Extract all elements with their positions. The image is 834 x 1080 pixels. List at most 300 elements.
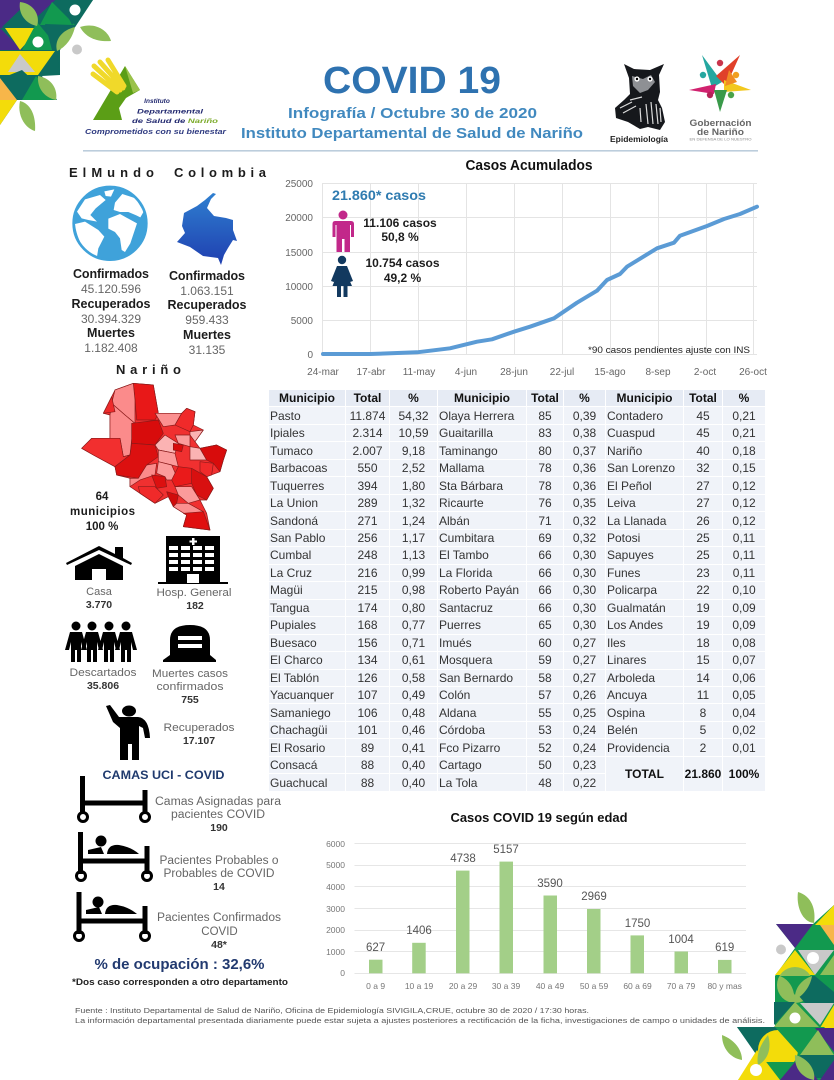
table: casos por municipio: Belén (607, 723, 638, 737)
table: casos por municipio: 0,02 (732, 723, 756, 737)
bed: pacientes confirmados (74, 892, 281, 951)
table: casos por municipio: 0,30 (573, 618, 596, 632)
stats: El Mundo: Confirmados (73, 267, 149, 281)
table: casos por municipio: 550 (357, 461, 378, 475)
stat: female cases (365, 256, 440, 285)
table: casos por municipio: Guachucal (270, 776, 327, 790)
table: casos por municipio: 0,99 (402, 566, 425, 580)
table: casos por municipio: 40 (696, 444, 710, 458)
chart grid (322, 183, 757, 355)
table: casos por municipio: 0,01 (732, 741, 756, 755)
table: casos por municipio: 0,40 (402, 776, 425, 790)
table: casos por municipio: 0,30 (573, 548, 596, 562)
stats: El Mundo: 1.182.408 (84, 341, 138, 355)
table: casos por municipio: 0,49 (402, 688, 425, 702)
bed: pacientes confirmados: 48* (211, 939, 228, 951)
logo: Gobernación de Nariño: de Nariño (697, 127, 744, 138)
value labels: 619 (715, 942, 734, 954)
table: casos por municipio: Policarpa (607, 583, 657, 597)
table: casos por municipio: 14 (696, 671, 710, 685)
table: casos por municipio: Pasto (270, 409, 301, 423)
table: casos por municipio: 0,06 (732, 671, 756, 685)
heading: Colombia: Colombia (174, 165, 267, 180)
table: casos por municipio: 248 (357, 548, 378, 562)
table: casos por municipio: Ancuya (607, 688, 647, 702)
table: casos por municipio: 0,11 (733, 566, 755, 580)
table: casos por municipio: 0,98 (402, 583, 425, 597)
table: casos por municipio: Santacruz (439, 601, 493, 615)
stats: Colombia: Recuperados (168, 298, 247, 312)
icon: person waving (106, 705, 150, 760)
logo: Instituto Departamental de Salud de Nariño (85, 60, 227, 136)
source note: Fuente : Instituto Departamental de Salud de Nariño, Oficina de Epidemiología SIVIGILA,CRUE, octubre 30 de 2020 / 17:30 horas. (75, 1006, 589, 1015)
table: casos por municipio: 2,52 (402, 461, 425, 475)
table: casos por municipio: 156 (357, 636, 378, 650)
value labels: 4738 (450, 853, 476, 865)
stat: Hosp. General: Hosp. General (156, 587, 232, 599)
stat: Hosp. General: 182 (186, 600, 204, 612)
table: casos por municipio: 69 (538, 531, 552, 545)
table: casos por municipio: Barbacoas (270, 461, 327, 475)
table: casos por municipio: 0,12 (732, 479, 756, 493)
category labels: 70 a 79 (667, 981, 695, 991)
table: casos por municipio: 25 (696, 531, 710, 545)
table: casos por municipio: 83 (538, 426, 552, 440)
table: casos por municipio: Consacá (270, 758, 317, 772)
table: casos por municipio: 21.860 (685, 767, 721, 781)
table: casos por municipio: 66 (538, 548, 552, 562)
table: casos por municipio: 78 (538, 461, 552, 475)
table: casos por municipio: Imués (439, 636, 472, 650)
table: casos por municipio: 80 (538, 444, 552, 458)
table: casos por municipio: % (739, 391, 749, 405)
table: casos por municipio: Yacuanquer (270, 688, 334, 702)
table: casos por municipio: Guaitarilla (439, 426, 493, 440)
table: casos por municipio: 58 (538, 671, 552, 685)
logo: Epidemiología owl (610, 64, 668, 144)
category labels: 50 a 59 (580, 981, 608, 991)
table: casos por municipio: 0,12 (732, 514, 756, 528)
y axis labels: 0 (340, 968, 345, 978)
note: pending cases: *90 casos pendientes ajuste con INS (588, 345, 750, 356)
table: casos por municipio: 0,46 (402, 723, 425, 737)
stat: municipios (70, 491, 135, 533)
value labels (366, 844, 734, 954)
subtitle: date: Infografía / Octubre 30 de 2020 (288, 105, 537, 122)
stats: Colombia: Confirmados (169, 269, 245, 283)
table: casos por municipio: 1,13 (402, 548, 425, 562)
stat: Hosp. General (156, 536, 232, 612)
table: casos por municipio: 32 (696, 461, 710, 475)
stat: Muertes casos confirmados: 755 (181, 694, 199, 706)
category labels (366, 981, 742, 991)
source note (75, 1006, 765, 1025)
table: casos por municipio: 0,36 (573, 479, 596, 493)
y axis labels: 0 (307, 350, 313, 361)
table: casos por municipio: 1,80 (402, 479, 425, 493)
table: casos por municipio: Los Andes (607, 618, 663, 632)
stat: Recuperados: 17.107 (183, 735, 215, 747)
table: casos por municipio: Magüi (270, 583, 303, 597)
table: casos por municipio: 0,09 (732, 618, 756, 632)
bed: pacientes probables: Pacientes Probables o (160, 855, 278, 867)
icon: Colombia map (177, 193, 237, 265)
table: casos por municipio: Nariño (607, 444, 642, 458)
table: casos por municipio: 0,30 (573, 583, 596, 597)
table: casos por municipio: 0,32 (573, 531, 596, 545)
stats: Colombia: 959.433 (185, 313, 229, 327)
table: casos por municipio: Potosi (607, 531, 640, 545)
table: casos por municipio: Ricaurte (439, 496, 484, 510)
table: casos por municipio: 85 (538, 409, 552, 423)
category labels: 30 a 39 (492, 981, 520, 991)
table: casos por municipio: 0,04 (732, 706, 756, 720)
stats: El Mundo: Recuperados (72, 297, 151, 311)
table: casos por municipio: 271 (357, 514, 378, 528)
stats: Colombia: Muertes (183, 328, 231, 342)
icon: globe (73, 186, 147, 261)
table: casos por municipio: 45 (696, 409, 710, 423)
table: casos por municipio: 60 (538, 636, 552, 650)
table: casos por municipio: 0,71 (402, 636, 425, 650)
table: casos por municipio: La Union (270, 496, 318, 510)
source note: La información departamental presentada diariamente puede estar sujeta a ajustes posteriores a rectificación de la ficha, investigaciones de campo o unidades de análisis. (75, 1016, 765, 1025)
table: casos por municipio: 26 (696, 514, 710, 528)
table: casos por municipio: Aldana (439, 706, 476, 720)
table: casos por municipio: 88 (361, 758, 374, 772)
table: casos por municipio: 18 (696, 636, 710, 650)
subtitle: institute: Instituto Departamental de Salud de Nariño (241, 125, 583, 142)
stat: municipios: 64 (96, 491, 109, 503)
table: casos por municipio: 168 (357, 618, 378, 632)
table: casos por municipio: 59 (538, 653, 552, 667)
table: casos por municipio: Sta Bárbara (439, 479, 503, 493)
callout: occupancy: % de ocupación : 32,6% (94, 956, 264, 973)
stats: El Mundo: 30.394.329 (81, 312, 141, 326)
stats: El Mundo: 45.120.596 (81, 282, 141, 296)
table: casos por municipio: El Charco (270, 653, 323, 667)
stat: Recuperados (106, 705, 235, 760)
table: casos por municipio: 65 (538, 618, 552, 632)
table: casos por municipio: Colón (439, 688, 470, 702)
stat: Descartados: 35.806 (87, 680, 119, 692)
table: casos por municipio: 0,40 (402, 758, 425, 772)
table: casos por municipio: 394 (357, 479, 378, 493)
heading: Camas UCI: CAMAS UCI - COVID (102, 768, 225, 782)
chart: Casos según edad (326, 810, 746, 991)
stats: El Mundo: Muertes (87, 326, 135, 340)
table: casos por municipio: 0,21 (732, 409, 756, 423)
icon: occupied bed (76, 832, 152, 880)
chart: Casos Acumulados (285, 158, 767, 378)
table: casos por municipio: 19 (696, 601, 710, 615)
table: casos por municipio: La Tola (439, 776, 477, 790)
stat: male cases (363, 216, 437, 244)
stat: male cases: 11.106 casos (363, 216, 437, 230)
table: casos por municipio: 0,39 (573, 409, 596, 423)
table: casos por municipio: El Tambo (439, 548, 489, 562)
table: casos por municipio: Total (689, 391, 717, 405)
x axis labels: 11-may (403, 367, 435, 378)
table: casos por municipio: 0,25 (573, 706, 596, 720)
table: casos por municipio: 0,18 (732, 444, 756, 458)
value labels: 3590 (537, 878, 563, 890)
stats: Colombia: 31.135 (189, 343, 226, 357)
decoration: top-left geometric corner (0, 0, 111, 131)
table: casos por municipio: San Lorenzo (607, 461, 675, 475)
table: casos por municipio: Puerres (439, 618, 481, 632)
heading: Nariño: Nariño (116, 362, 181, 377)
table: casos por municipio: 11.874 (350, 409, 385, 423)
bed: camas asignadas: 190 (210, 822, 228, 834)
table: casos por municipio: Ipiales (270, 426, 305, 440)
table: casos por municipio: Córdoba (439, 723, 485, 737)
x axis labels: 2-oct (694, 367, 716, 378)
icon: man (332, 210, 354, 252)
decoration: bottom-right geometric corner (722, 892, 834, 1080)
table: casos por municipio: El Tablón (270, 671, 319, 685)
table: casos por municipio: 88 (361, 776, 374, 790)
icon: empty bed (78, 776, 150, 822)
table: casos por municipio: 76 (538, 496, 552, 510)
icon: occupied bed (74, 892, 150, 940)
table: casos por municipio: 0,35 (573, 496, 596, 510)
stat: Recuperados: Recuperados (164, 722, 235, 734)
y axis labels: 15000 (285, 248, 313, 259)
y axis labels: 3000 (326, 904, 345, 914)
bars (369, 862, 732, 973)
panel: El Mundo (69, 165, 154, 355)
table: casos por municipio: San Pablo (270, 531, 325, 545)
category labels: 0 a 9 (366, 981, 385, 991)
stat: Descartados: Descartados (70, 667, 137, 679)
stat: female cases: 10.754 casos (365, 256, 440, 270)
stat: municipios: 100 % (86, 521, 118, 533)
y axis labels: 5000 (326, 860, 345, 870)
table: casos por municipio: 215 (357, 583, 378, 597)
value labels: 1750 (625, 918, 650, 930)
table: casos por municipio: Olaya Herrera (439, 409, 514, 423)
table: casos por municipio: 0,12 (732, 496, 756, 510)
bed: camas asignadas: Camas Asignadas para (155, 796, 282, 808)
table: casos por municipio: 48 (538, 776, 552, 790)
table: casos por municipio: 0,77 (402, 618, 425, 632)
stat: Muertes casos confirmados: confirmados (156, 681, 224, 693)
stat: male cases: 50,8 % (381, 230, 419, 244)
table: casos por municipio: 15 (696, 653, 710, 667)
title: COVID 19 (323, 60, 501, 102)
table: casos por municipio: 174 (357, 601, 378, 615)
table: casos por municipio: 0,11 (733, 531, 755, 545)
table: casos por municipio: 55 (538, 706, 552, 720)
table: casos por municipio: Ospina (607, 706, 645, 720)
table: casos por municipio: 0,61 (402, 653, 425, 667)
x axis labels: 15-ago (594, 367, 626, 378)
table: casos por municipio: 216 (357, 566, 378, 580)
bed: pacientes probables: 14 (213, 881, 225, 893)
heading: El Mundo: ElMundo (69, 165, 154, 180)
table: casos por municipio: 256 (357, 531, 378, 545)
table: casos por municipio: 66 (538, 583, 552, 597)
logo: Instituto Departamental de Salud de Nariño: Departamental (137, 108, 203, 116)
table: casos por municipio: 19 (696, 618, 710, 632)
table: casos por municipio: 0,26 (573, 688, 596, 702)
logo: Gobernación de Nariño (689, 55, 752, 142)
category labels: 80 y mas (707, 981, 742, 991)
category labels: 40 a 49 (536, 981, 564, 991)
bed: pacientes probables: Probables de COVID (164, 868, 274, 880)
bed: pacientes probables (76, 832, 278, 893)
stat: municipios: municipios (70, 506, 135, 518)
table: casos por municipio: 57 (538, 688, 552, 702)
table: casos por municipio: 78 (538, 479, 552, 493)
table: casos por municipio: 66 (538, 566, 552, 580)
x axis labels: 24-mar (307, 367, 340, 378)
table: casos por municipio: San Bernardo (439, 671, 513, 685)
table: casos por municipio: Roberto Payán (439, 583, 519, 597)
table: casos por municipio: 2.007 (352, 444, 383, 458)
x axis labels: 8-sep (645, 367, 671, 378)
value labels: 1406 (406, 925, 432, 937)
table: casos por municipio: 45 (696, 426, 710, 440)
table: casos por municipio: 1,32 (402, 496, 425, 510)
table: casos por municipio: El Peñol (607, 479, 652, 493)
value labels: 627 (366, 942, 385, 954)
y axis labels (326, 839, 345, 978)
table: casos por municipio: 10,59 (398, 426, 429, 440)
table: casos por municipio: Iles (607, 636, 626, 650)
stats: El Mundo (72, 267, 151, 355)
table: casos por municipio: Mosquera (439, 653, 492, 667)
icon: tombstone (163, 625, 216, 662)
table: casos por municipio: Total (354, 391, 381, 405)
table: casos por municipio: Tuquerres (270, 479, 324, 493)
table: casos por municipio: Arboleda (607, 671, 655, 685)
table: casos por municipio: Total (531, 391, 559, 405)
y axis labels: 10000 (285, 282, 313, 293)
y axis labels: 25000 (285, 179, 313, 190)
stat: Muertes casos confirmados: Muertes casos (152, 668, 229, 680)
chart title: Casos Acumulados (466, 158, 592, 174)
table: casos por municipio: 71 (538, 514, 552, 528)
table: casos por municipio: Fco Pizarro (439, 741, 500, 755)
table: casos por municipio: 0,58 (402, 671, 425, 685)
table: casos por municipio: Municipio (616, 391, 672, 405)
table: casos por municipio: 50 (538, 758, 552, 772)
table: casos por municipio: % (579, 391, 590, 405)
logo: Gobernación de Nariño: Gobernación (690, 118, 752, 129)
table: casos por municipio: 25 (696, 548, 710, 562)
table: casos por municipio: 0,41 (402, 741, 425, 755)
logo: Instituto Departamental de Salud de Nariño: Instituto (144, 98, 170, 105)
bed: pacientes confirmados: COVID (201, 926, 238, 938)
x axis labels: 4-jun (455, 367, 477, 378)
table: casos por municipio: 0,08 (732, 636, 756, 650)
table: casos por municipio: Chachagüi (270, 723, 327, 737)
table: casos por municipio: Municipio (454, 391, 510, 405)
stat: Casa: 3.770 (86, 599, 112, 611)
table: casos por municipio: 5 (700, 723, 706, 737)
table: casos por municipio: 289 (357, 496, 378, 510)
table: casos por municipio: Linares (607, 653, 646, 667)
x axis labels: 26-oct (739, 367, 767, 378)
table: casos por municipio: Buesaco (270, 636, 317, 650)
table: casos por municipio: 1,17 (402, 531, 425, 545)
table: casos por municipio: 134 (357, 653, 378, 667)
y axis labels: 2000 (326, 925, 345, 935)
value labels: 2969 (581, 891, 607, 903)
y axis labels (285, 179, 313, 361)
table: casos por municipio: 0,38 (573, 426, 596, 440)
table: casos por municipio: 0,21 (732, 426, 756, 440)
bed: camas asignadas (78, 776, 282, 834)
map: Nariño (82, 383, 227, 530)
table: casos por municipio: 1,24 (402, 514, 425, 528)
table: casos por municipio: 0,05 (732, 688, 756, 702)
table: casos por municipio: 0,23 (573, 758, 596, 772)
table: casos por municipio: Contadero (607, 409, 663, 423)
stat: Descartados (65, 622, 137, 692)
callout: total cases: 21.860* casos (332, 187, 426, 203)
logo: Epidemiología owl: Epidemiología (610, 134, 668, 144)
icon: house (66, 546, 132, 580)
line: cumulative cases (323, 207, 757, 354)
table: casos por municipio (269, 390, 765, 791)
table: casos por municipio: 0,27 (573, 671, 596, 685)
table: casos por municipio: Municipio (279, 391, 335, 405)
table: casos por municipio: 0,27 (573, 636, 596, 650)
table: casos por municipio: 0,30 (573, 601, 596, 615)
table: casos por municipio: 0,80 (402, 601, 425, 615)
table: casos por municipio: 8 (700, 706, 706, 720)
table: casos por municipio: Leiva (607, 496, 636, 510)
table: casos por municipio: La Cruz (270, 566, 312, 580)
table: casos por municipio: Sandoná (270, 514, 318, 528)
table: casos por municipio: 0,30 (573, 566, 596, 580)
table: casos por municipio: 100% (729, 767, 759, 781)
table: casos por municipio: La Llanada (607, 514, 666, 528)
logo: Instituto Departamental de Salud de Nariño: Comprometidos con su bienestar (85, 127, 227, 136)
table: casos por municipio: 2.314 (352, 426, 383, 440)
table: casos por municipio: Sapuyes (607, 548, 654, 562)
y axis labels: 4000 (326, 882, 345, 892)
stat: female cases: 49,2 % (384, 271, 422, 285)
category labels: 10 a 19 (405, 981, 433, 991)
table: casos por municipio: 23 (696, 566, 710, 580)
table: casos por municipio: 0,15 (732, 461, 756, 475)
table: casos por municipio: Cuaspud (607, 426, 655, 440)
table: casos por municipio: 107 (357, 688, 378, 702)
table: casos por municipio: Taminango (439, 444, 498, 458)
icon: hospital (158, 536, 228, 584)
table: casos por municipio: 27 (696, 496, 710, 510)
table: casos por municipio: 66 (538, 601, 552, 615)
x axis labels: 22-jul (550, 367, 574, 378)
table: casos por municipio: 27 (696, 479, 710, 493)
table: casos por municipio: La Florida (439, 566, 492, 580)
logo: Gobernación de Nariño: EN DEFENSA DE LO NUESTRO (690, 138, 752, 142)
icon: people (65, 622, 137, 662)
table: casos por municipio: 106 (357, 706, 378, 720)
table: casos por municipio: 9,18 (402, 444, 425, 458)
table: casos por municipio: % (408, 391, 419, 405)
chart title: Casos COVID 19 según edad (450, 810, 628, 825)
table: casos por municipio: Cartago (439, 758, 482, 772)
note: other department: *Dos caso corresponden a otro departamento (72, 977, 289, 987)
table: casos por municipio: 0,22 (573, 776, 596, 790)
table: casos por municipio: Funes (607, 566, 640, 580)
value labels: 1004 (668, 934, 694, 946)
